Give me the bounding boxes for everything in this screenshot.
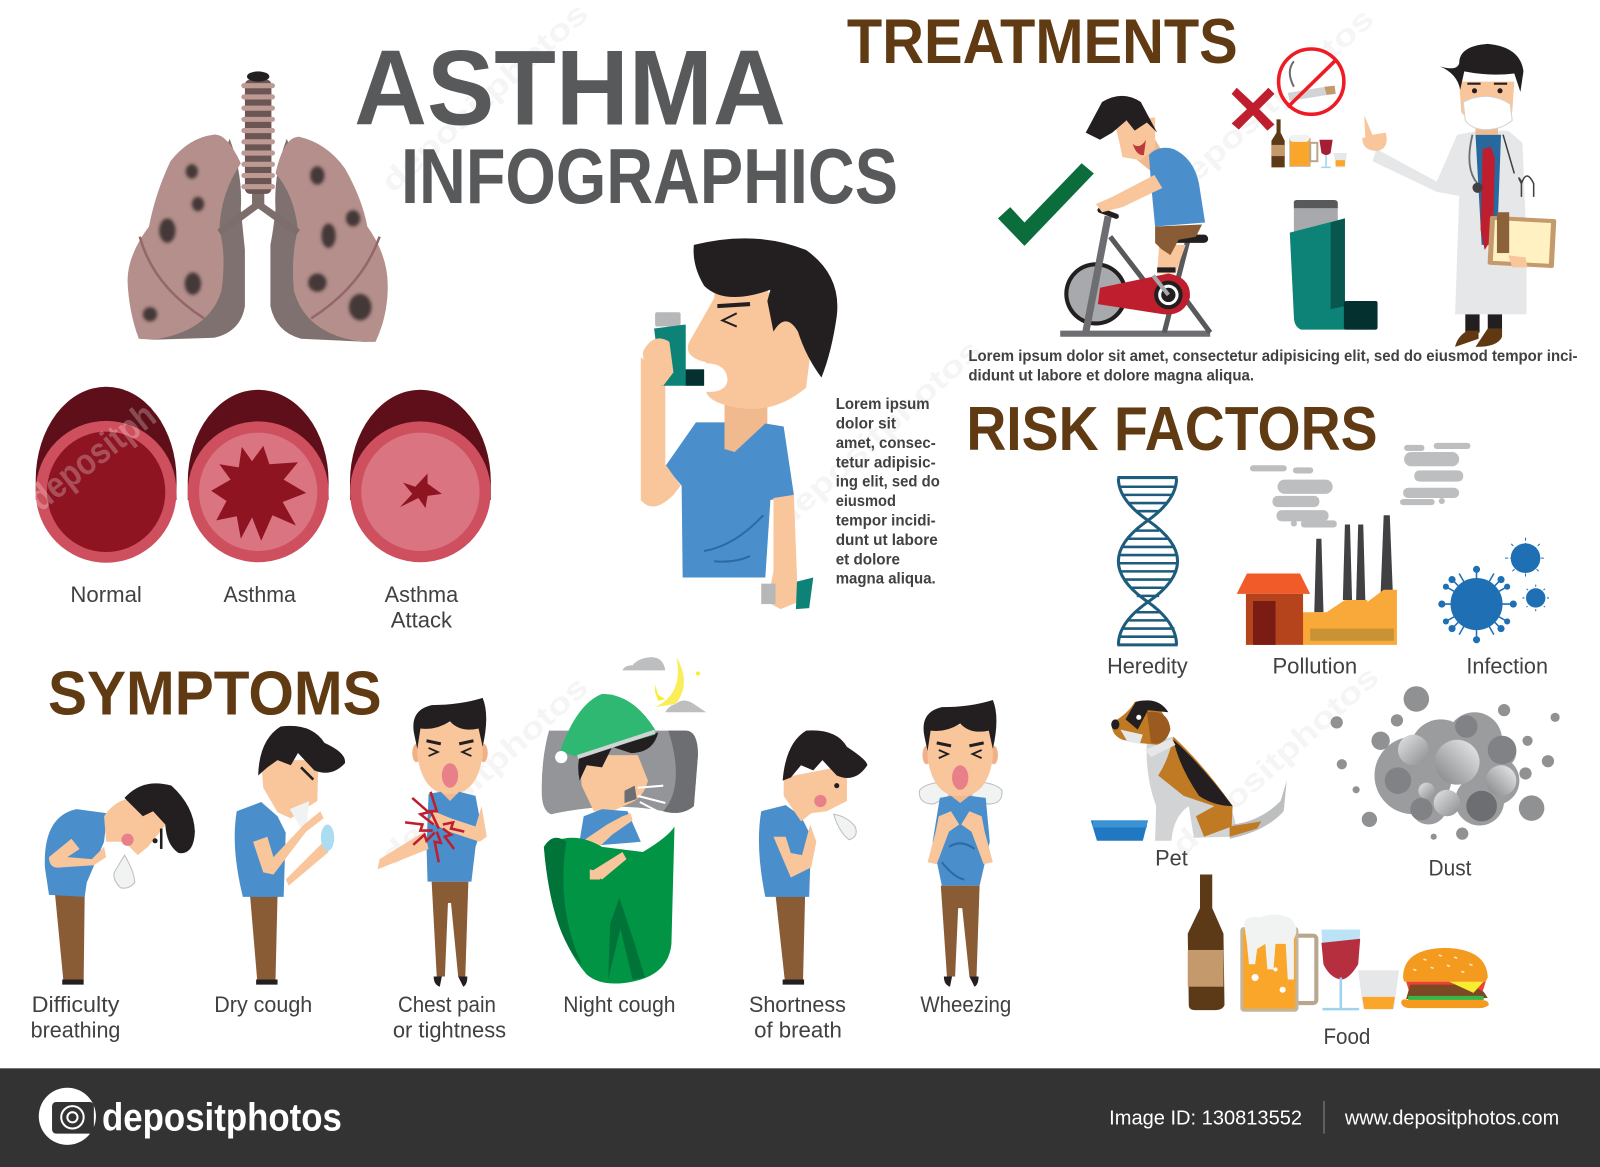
icon: green check mark: [998, 163, 1094, 246]
watermarks: depositphotos: [375, 0, 595, 199]
airway labels: Normal: [70, 582, 142, 607]
label: food: Food: [1323, 1024, 1370, 1049]
airway labels: Attack: [391, 608, 453, 633]
airway labels: [70, 582, 459, 633]
risk labels row 1: Infection: [1466, 653, 1548, 678]
title: [354, 27, 898, 220]
side text block: [836, 396, 940, 588]
side text block: magna aliqua.: [836, 571, 936, 588]
airway: asthma: [188, 390, 329, 562]
risk labels row 1: Heredity: [1107, 653, 1188, 678]
lungs illustration: [128, 71, 388, 342]
man on exercise bike: [1060, 96, 1210, 337]
watermarks: depositphotos: [1166, 660, 1386, 862]
figure: difficulty breathing: [45, 783, 195, 985]
footer bar: www.depositphotos.com: [1344, 1107, 1559, 1129]
watermark over airway: depositpho: [20, 383, 178, 519]
figure: shortness of breath: [759, 730, 867, 985]
side text block: tempor incidi-: [836, 512, 936, 529]
watermarks: depositphotos: [1161, 1, 1380, 204]
airway labels: Asthma: [223, 582, 296, 607]
side text block: et dolore: [836, 551, 900, 568]
risk labels row 1: Pollution: [1272, 653, 1357, 678]
label: pet: Pet: [1155, 845, 1188, 870]
treatments text: [968, 348, 1578, 385]
airway: normal: [36, 387, 177, 563]
icon: red cross: [1232, 88, 1274, 131]
footer logo mark: [39, 1088, 96, 1145]
doctor: [1362, 44, 1556, 347]
heading: risk factors: RISK FACTORS: [966, 395, 1378, 464]
icon: DNA helix: [1117, 478, 1178, 645]
side text block: eiusmod: [836, 493, 896, 510]
icon: viruses: [1438, 538, 1549, 643]
heading: treatments: TREATMENTS: [847, 7, 1238, 77]
title: ASTHMA: [354, 27, 786, 147]
icon: factory and smoke: [1237, 443, 1470, 645]
treatments text: didunt ut labore et dolore magna aliqua.: [968, 368, 1254, 385]
label: dust: Dust: [1429, 855, 1472, 880]
symptom labels: Difficulty: [32, 992, 120, 1017]
symptom labels: breathing: [31, 1018, 120, 1043]
watermarks: depositphotos: [768, 333, 988, 536]
icon: moon, clouds and stars: [622, 657, 706, 712]
symptom labels: [31, 992, 1011, 1043]
figure: night cough: [542, 694, 698, 984]
side text block: dolor sit: [836, 416, 896, 433]
icon: no smoking sign: [1279, 49, 1344, 114]
symptom labels: Shortness: [749, 992, 846, 1017]
man using inhaler: [641, 238, 837, 609]
icon: dust cloud: [1331, 686, 1560, 840]
symptom labels: Wheezing: [920, 992, 1011, 1017]
figure: dry cough: [235, 726, 345, 985]
footer bar: depositphotos: [102, 1097, 342, 1140]
symptom labels: Dry cough: [214, 992, 312, 1017]
side text block: Lorem ipsum: [836, 396, 930, 413]
side text block: amet, consec-: [836, 435, 936, 452]
footer bar: Image ID: 130813552: [1109, 1107, 1302, 1129]
symptom labels: or tightness: [393, 1018, 506, 1043]
large inhaler: [1290, 200, 1378, 330]
title: INFOGRAPHICS: [401, 134, 898, 220]
icon: small drinks: [1271, 119, 1347, 167]
heading: symptoms: SYMPTOMS: [48, 659, 382, 728]
airway: asthma attack: [350, 390, 491, 562]
risk labels row 1: [1107, 653, 1548, 678]
icon: dog with bowl: [1091, 700, 1287, 841]
watermarks: [375, 0, 1386, 873]
food and drink: [1188, 874, 1489, 1010]
symptom labels: of breath: [754, 1018, 842, 1043]
watermarks: depositphotos: [375, 670, 595, 873]
footer bar: [0, 1068, 1600, 1167]
treatments text: Lorem ipsum dolor sit amet, consectetur adipisicing elit, sed do eiusmod tempor inci-: [968, 348, 1578, 365]
symptom labels: Night cough: [563, 992, 676, 1017]
figure: wheezing: [919, 700, 1002, 987]
side text block: dunt ut labore: [836, 532, 938, 549]
side text block: tetur adipisic-: [836, 454, 936, 471]
figure: chest pain: [378, 698, 488, 987]
symptom labels: Chest pain: [398, 992, 496, 1017]
side text block: ing elit, sed do: [836, 474, 940, 491]
airway labels: Asthma: [385, 582, 459, 607]
